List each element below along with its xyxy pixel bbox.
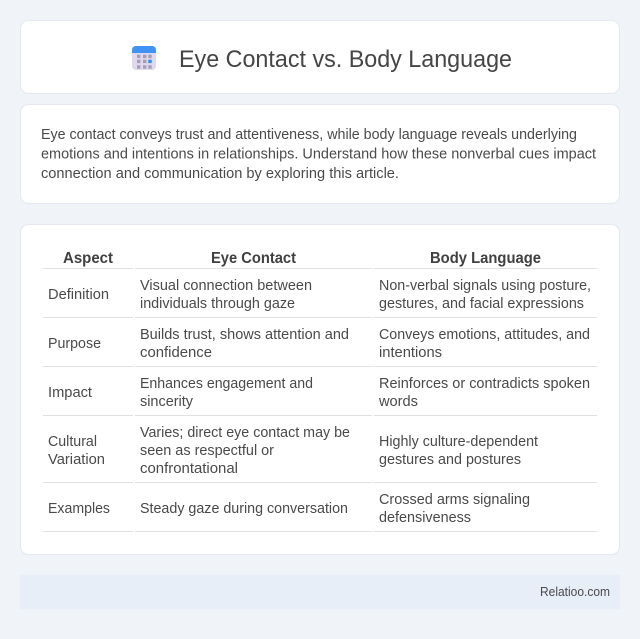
table row: examples: Examples [48,501,110,517]
table row: cultural variation: Cultural [48,434,97,450]
text block: introduction [41,127,596,182]
panel: comparison table [20,224,620,554]
table row: examples: Crossed arms signaling [379,492,530,508]
table row: purpose: confidence [140,345,212,361]
table row: cultural variation: Variation [48,452,105,468]
table row: impact: sincerity [140,394,194,410]
table row: purpose: intentions [379,345,442,361]
table row: impact: Enhances engagement and [140,376,313,392]
table row: definition: Visual connection between [140,278,312,294]
table row: definition: gestures, and facial expressions [379,296,584,312]
table row: cultural variation: Varies; direct eye contact may be [140,425,350,441]
title: Eye Contact vs. Body Language [179,46,512,73]
table row: examples: defensiveness [379,510,471,526]
table row: definition [48,278,591,312]
table row: cultural variation: confrontational [140,461,238,477]
table row: purpose: Builds trust, shows attention and [140,327,349,343]
panel: header [20,20,620,94]
table row: cultural variation [48,425,538,477]
table row: purpose [48,327,590,361]
table row: cultural variation: seen as respectful or [140,443,274,459]
table header row: Eye Contact [211,250,296,267]
table row: definition: Definition [48,287,109,303]
table row: definition: Non-verbal signals using posture, [379,278,591,294]
footer [20,575,620,609]
table row: cultural variation: gestures and postures [379,452,521,468]
icon: calendar grid [132,46,156,70]
table row: impact: Impact [48,385,92,401]
table header row [63,250,541,267]
table header row: Aspect [63,250,113,267]
text block: introduction: emotions and intentions in relationships. Understand how these nonverbal cues impact [41,146,596,162]
table row: impact: Reinforces or contradicts spoken [379,376,590,392]
table row: impact [48,376,590,410]
footer credit: Relatioo.com [540,585,610,599]
table row: purpose: Conveys emotions, attitudes, and [379,327,590,343]
table row: examples: Steady gaze during conversation [140,501,348,517]
text block: introduction: connection and communication by exploring this article. [41,166,399,182]
table row: cultural variation: Highly culture-dependent [379,434,538,450]
table header row: Body Language [430,250,541,267]
table row: purpose: Purpose [48,336,101,352]
table row: examples [48,492,530,526]
text block: introduction: Eye contact conveys trust and attentiveness, while body language reveals underlying [41,127,577,143]
panel: introduction [20,104,620,204]
table row: impact: words [378,394,418,410]
table row: definition: individuals through gaze [140,296,295,312]
